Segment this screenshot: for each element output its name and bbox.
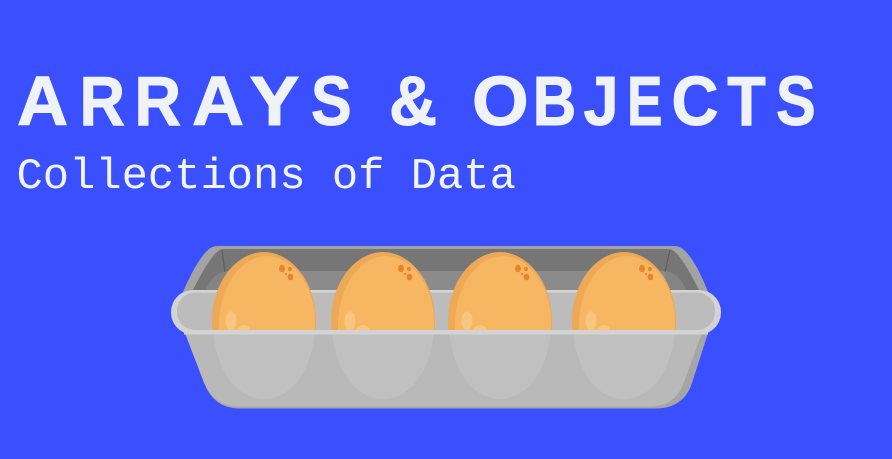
title: S	[776, 61, 816, 140]
title: J	[584, 63, 619, 141]
egg shadows through tray	[213, 252, 675, 399]
title: A	[17, 61, 68, 140]
egg 1	[212, 252, 316, 330]
tray rim	[171, 290, 721, 334]
egg 4	[572, 252, 676, 330]
tray front body	[186, 334, 708, 408]
title: T	[727, 63, 766, 141]
subtitle: Collections of Data	[16, 153, 516, 202]
title: Y	[250, 62, 299, 140]
title: A	[192, 63, 244, 141]
title: C	[672, 63, 719, 141]
tray back wall	[183, 246, 708, 292]
title: S	[311, 62, 352, 140]
title	[17, 61, 816, 141]
title: O	[472, 62, 529, 141]
title: R	[134, 63, 181, 141]
tray rim front lip	[184, 328, 708, 334]
illustration: egg tray	[171, 246, 721, 408]
title: &	[389, 62, 437, 140]
egg 3	[448, 252, 552, 330]
title: B	[533, 62, 576, 140]
title: R	[80, 63, 125, 141]
egg 2	[331, 252, 435, 330]
title: E	[627, 63, 662, 141]
